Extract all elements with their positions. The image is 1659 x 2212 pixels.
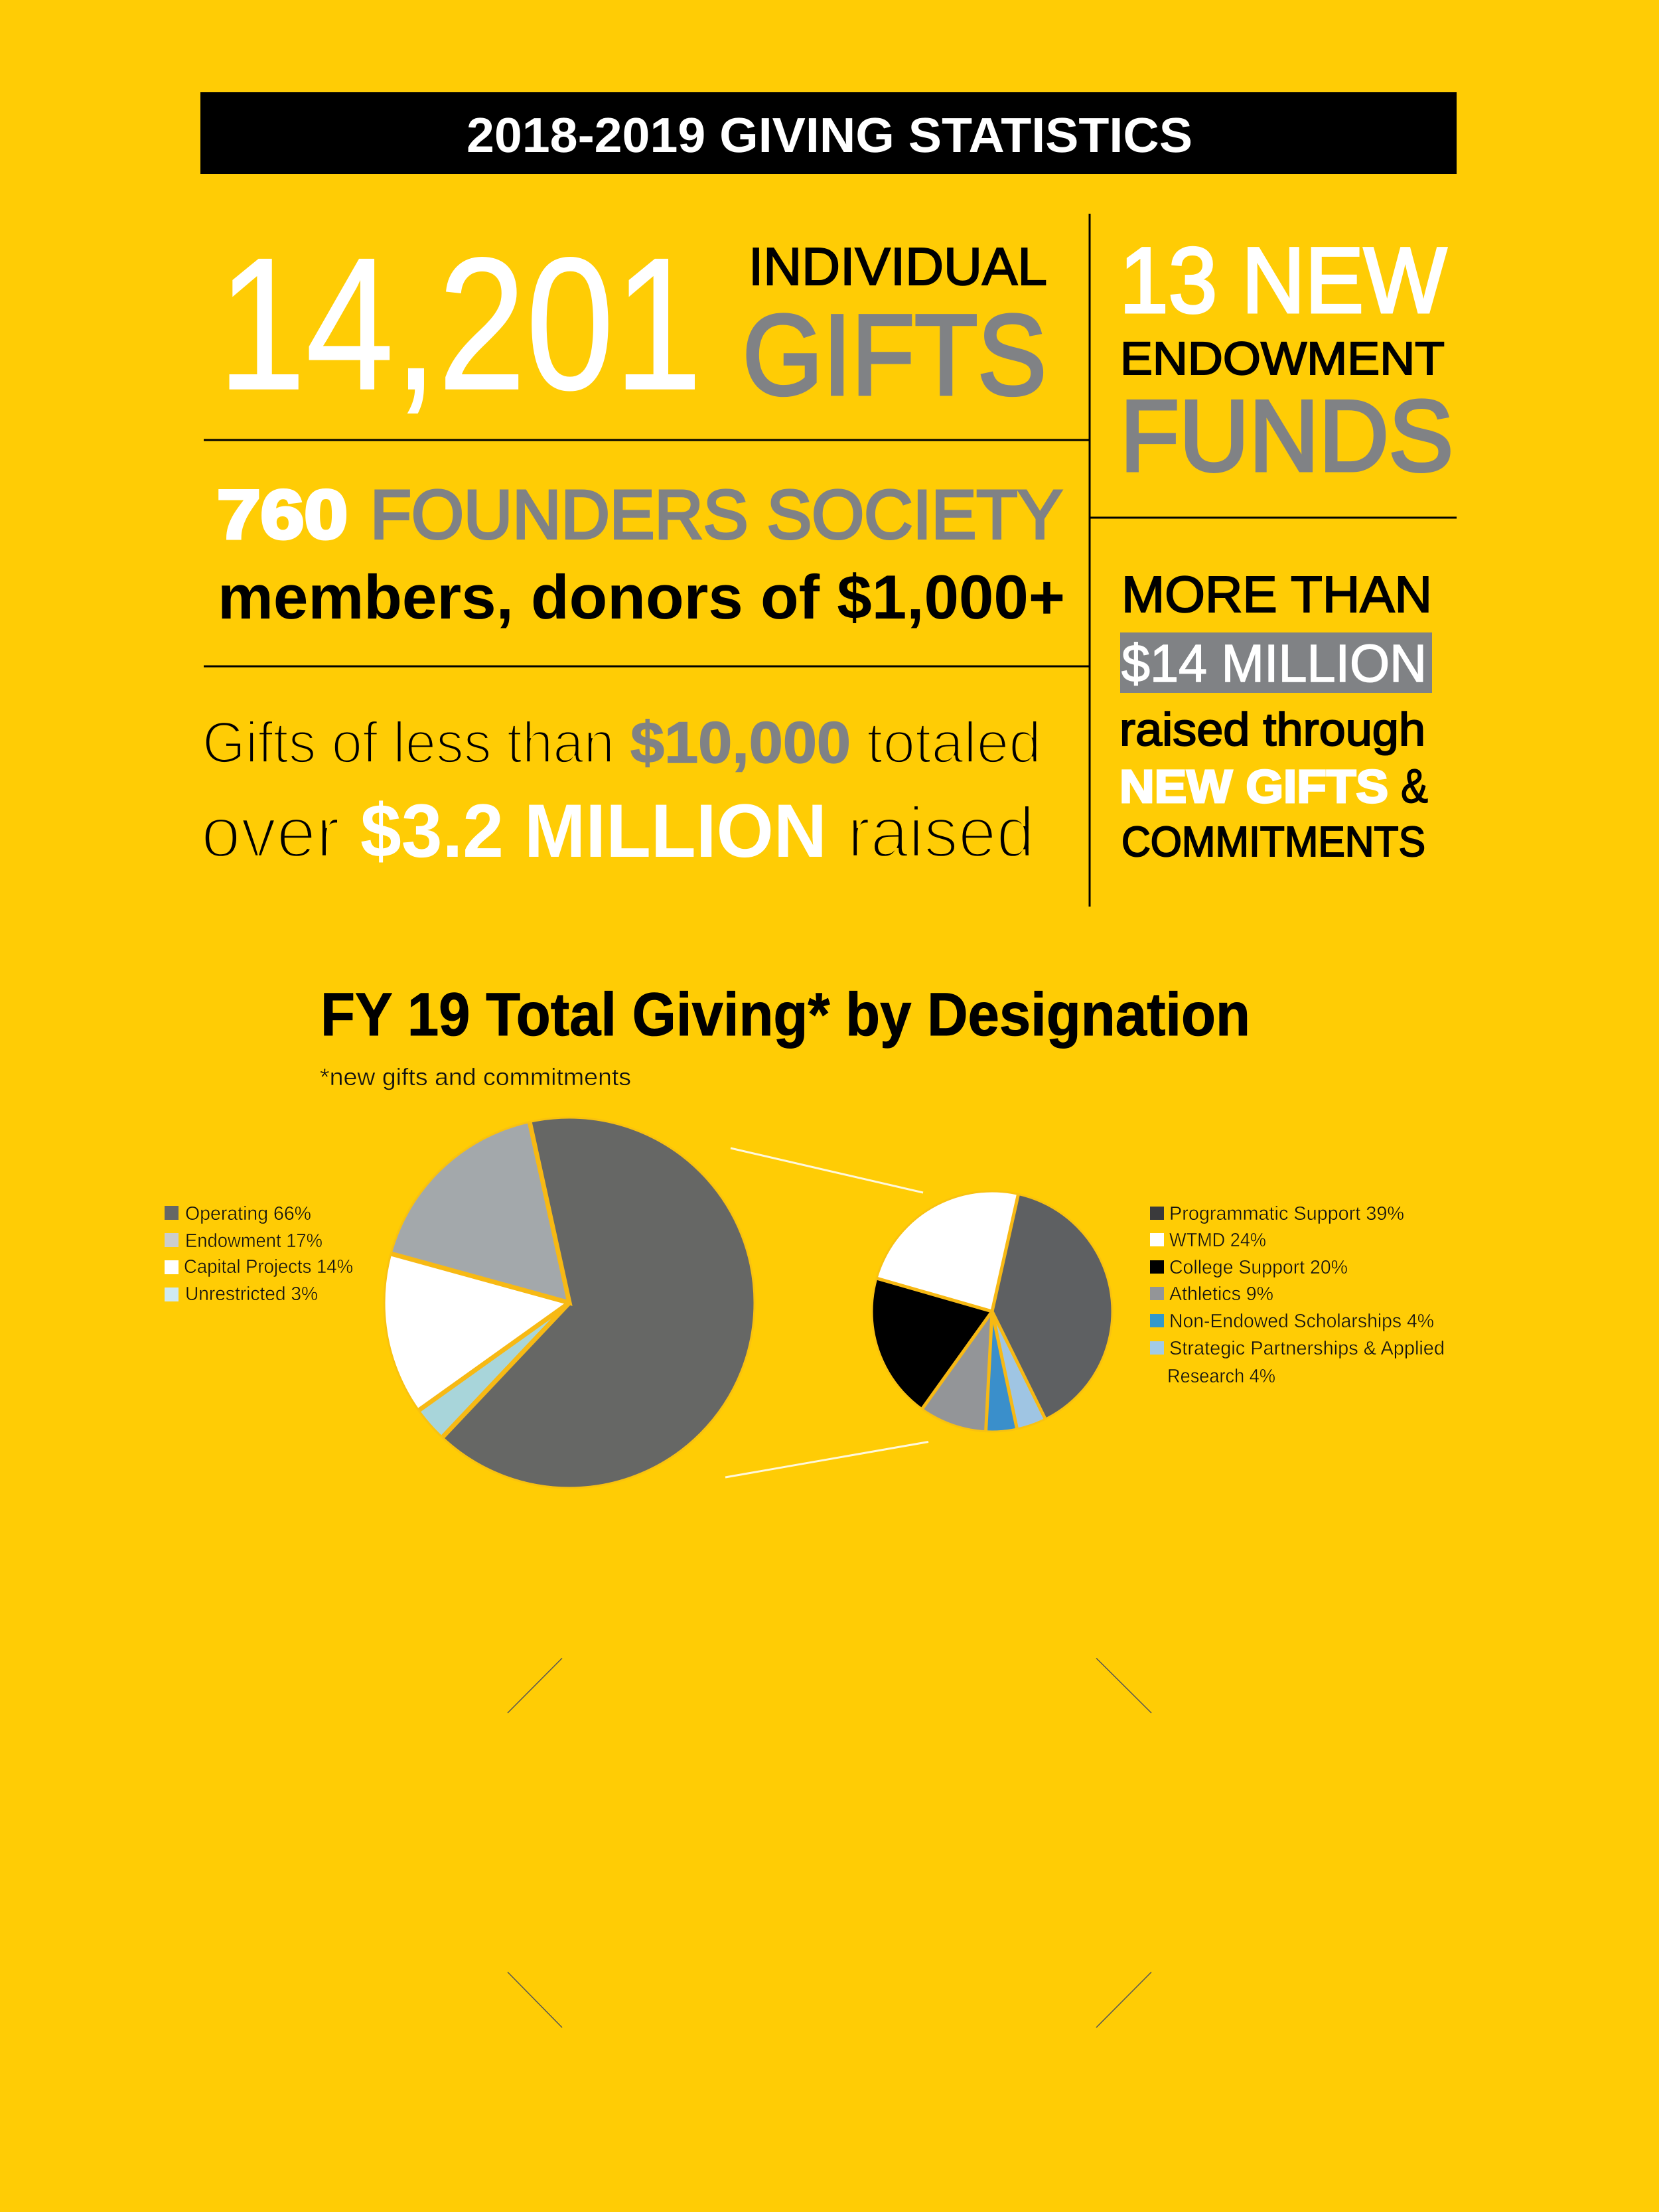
stat: 14,201 individual gifts: 14,201 <box>218 219 702 429</box>
stat: more than $14 million: & <box>1401 760 1428 813</box>
slice: programmatic support 39% <box>992 1195 1112 1418</box>
stat: more than $14 million: MORE THAN <box>1121 566 1432 623</box>
stat: gifts under $10,000: Gifts of less than <box>202 709 614 775</box>
stat: 13 new endowment funds: FUNDS <box>1120 380 1453 492</box>
stat: 13 new endowment funds <box>1119 228 1453 492</box>
stat: gifts under $10,000: raised <box>847 792 1035 872</box>
pie chart: total giving <box>384 1118 755 1488</box>
stat: 760 founders society: FOUNDERS SOCIETY <box>370 477 1062 553</box>
chart heading <box>320 981 1250 1090</box>
legend: operating breakdown: Programmatic Support 39% <box>1169 1203 1404 1224</box>
legend: operating breakdown: WTMD 24% <box>1169 1230 1266 1251</box>
legend: operating breakdown: Strategic Partnerships & Applied <box>1169 1338 1445 1359</box>
pie chart: operating breakdown <box>872 1191 1112 1432</box>
stat: gifts under $10,000: over <box>201 792 340 872</box>
stat: 760 founders society: members, donors of $1,000+ <box>218 562 1065 632</box>
slice: college support 20% <box>873 1278 992 1408</box>
stat: 760 founders society: 760 <box>217 477 348 553</box>
legend: total giving: Operating 66% <box>185 1203 311 1224</box>
stat: gifts under $10,000: $10,000 <box>630 709 851 775</box>
stat: more than $14 million: $14 MILLION <box>1121 634 1427 693</box>
legend: operating breakdown: Research 4% <box>1167 1366 1275 1387</box>
slice: endowment 17% <box>392 1123 569 1303</box>
stat: 14,201 individual gifts: INDIVIDUAL <box>749 237 1047 296</box>
legend: total giving: Unrestricted 3% <box>185 1284 318 1305</box>
title banner <box>200 92 1457 174</box>
slice: athletics 9% <box>922 1311 992 1431</box>
stat: gifts under $10,000: totaled <box>867 709 1041 775</box>
stat: gifts under $10,000 <box>201 709 1041 873</box>
connector lines <box>725 1148 928 1477</box>
stat: gifts under $10,000: $3.2 MILLION <box>360 789 827 873</box>
legend: operating breakdown: College Support 20% <box>1169 1257 1348 1278</box>
stat: 14,201 individual gifts <box>218 219 1047 429</box>
slice: operating 66% <box>443 1118 755 1487</box>
slice: unrestricted 3% <box>419 1303 569 1437</box>
stat: 13 new endowment funds: ENDOWMENT <box>1120 332 1445 384</box>
chart heading: FY 19 Total Giving* by Designation <box>321 981 1250 1049</box>
legend: operating breakdown <box>1150 1203 1445 1387</box>
stat: 14,201 individual gifts: GIFTS <box>743 291 1046 419</box>
legend: operating breakdown: Athletics 9% <box>1169 1284 1273 1305</box>
slice: capital projects 14% <box>385 1254 569 1410</box>
stat: more than $14 million: raised through <box>1119 703 1425 755</box>
legend: total giving <box>165 1203 353 1305</box>
stat: 13 new endowment funds: 13 NEW <box>1119 228 1447 332</box>
chart heading: *new gifts and commitments <box>320 1063 631 1090</box>
stat: 760 founders society <box>217 477 1065 632</box>
legend: total giving: Endowment 17% <box>185 1230 323 1252</box>
slice: non-endowed scholarships 4% <box>986 1311 1017 1431</box>
slice: WTMD 24% <box>877 1192 1018 1311</box>
stat: more than $14 million: NEW GIFTS <box>1119 761 1388 812</box>
stat: more than $14 million: COMMITMENTS <box>1121 818 1425 865</box>
stat: more than $14 million <box>1119 566 1432 865</box>
title banner: 2018-2019 GIVING STATISTICS <box>467 108 1192 163</box>
slice: strategic partnerships 4% <box>992 1311 1045 1428</box>
legend: total giving: Capital Projects 14% <box>184 1256 353 1278</box>
legend: operating breakdown: Non-Endowed Scholarships 4% <box>1169 1311 1434 1332</box>
